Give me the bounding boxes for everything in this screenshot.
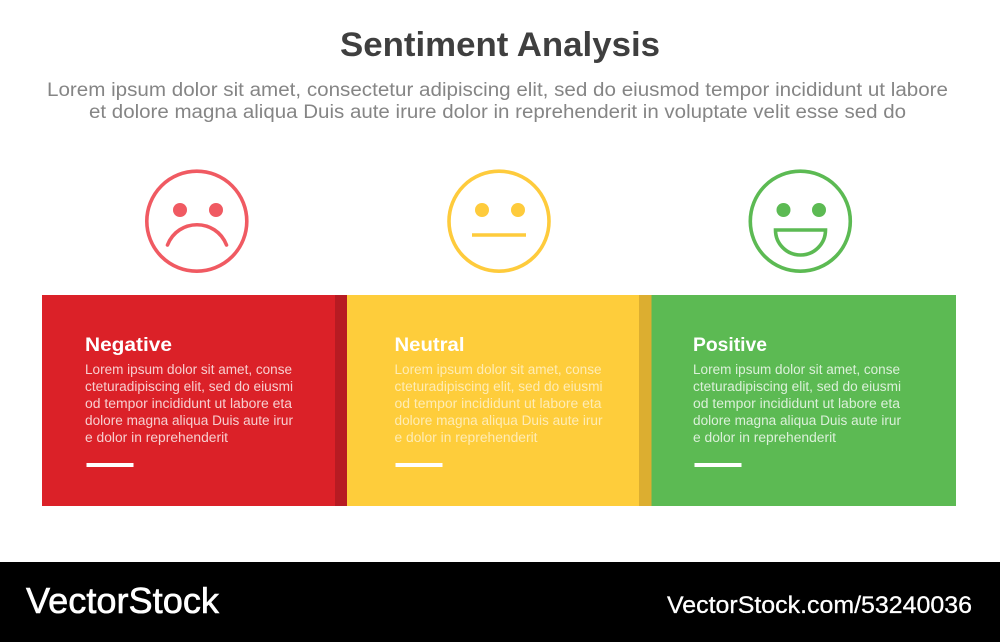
icon: happy face	[750, 171, 850, 271]
icon: neutral face	[449, 171, 549, 271]
body text: positive: dolore magna aliqua Duis aute irur	[693, 413, 902, 428]
title: Sentiment Analysis	[340, 26, 660, 64]
body text: positive: Lorem ipsum dolor sit amet, conse	[693, 362, 900, 377]
icon: sad face	[147, 171, 247, 271]
subtitle text block	[47, 80, 948, 123]
body text: positive: e dolor in reprehenderit	[693, 430, 836, 445]
heading: negative: Negative	[85, 335, 172, 356]
panel: neutral	[347, 295, 652, 506]
body text: neutral: cteturadipiscing elit, sed do eiusmi	[394, 379, 602, 394]
body text: neutral: od tempor incididunt ut labore eta	[394, 396, 602, 411]
body text: neutral: dolore magna aliqua Duis aute irur	[394, 413, 603, 428]
body text: negative	[85, 362, 294, 445]
body text: negative: od tempor incididunt ut labore eta	[85, 396, 292, 411]
body text: negative: e dolor in reprehenderit	[85, 430, 228, 445]
panel: negative	[42, 295, 347, 506]
subtitle text block: et dolore magna aliqua Duis aute irure dolor in reprehenderit in voluptate velit esse sed do	[89, 102, 906, 123]
footer logo: VectorStock	[26, 580, 220, 621]
footer url: VectorStock.com/53240036	[667, 592, 972, 619]
underline: positive	[694, 463, 742, 467]
body text: neutral	[394, 362, 603, 445]
subtitle text block: Lorem ipsum dolor sit amet, consectetur adipiscing elit, sed do eiusmod tempor incididunt ut labore	[47, 80, 948, 101]
panel: positive	[652, 295, 956, 506]
heading: positive: Positive	[693, 335, 767, 356]
body text: negative: cteturadipiscing elit, sed do eiusmi	[85, 379, 293, 394]
body text: positive: od tempor incididunt ut labore eta	[693, 396, 900, 411]
underline: negative	[86, 463, 134, 467]
body text: neutral: Lorem ipsum dolor sit amet, conse	[394, 362, 602, 377]
body text: neutral: e dolor in reprehenderit	[394, 430, 538, 445]
body text: positive: cteturadipiscing elit, sed do eiusmi	[693, 379, 901, 394]
body text: positive	[693, 362, 902, 445]
heading: neutral: Neutral	[394, 335, 464, 356]
footer bar	[0, 562, 1000, 642]
body text: negative: Lorem ipsum dolor sit amet, conse	[85, 362, 292, 377]
body text: negative: dolore magna aliqua Duis aute irur	[85, 413, 294, 428]
underline: neutral	[396, 463, 442, 467]
